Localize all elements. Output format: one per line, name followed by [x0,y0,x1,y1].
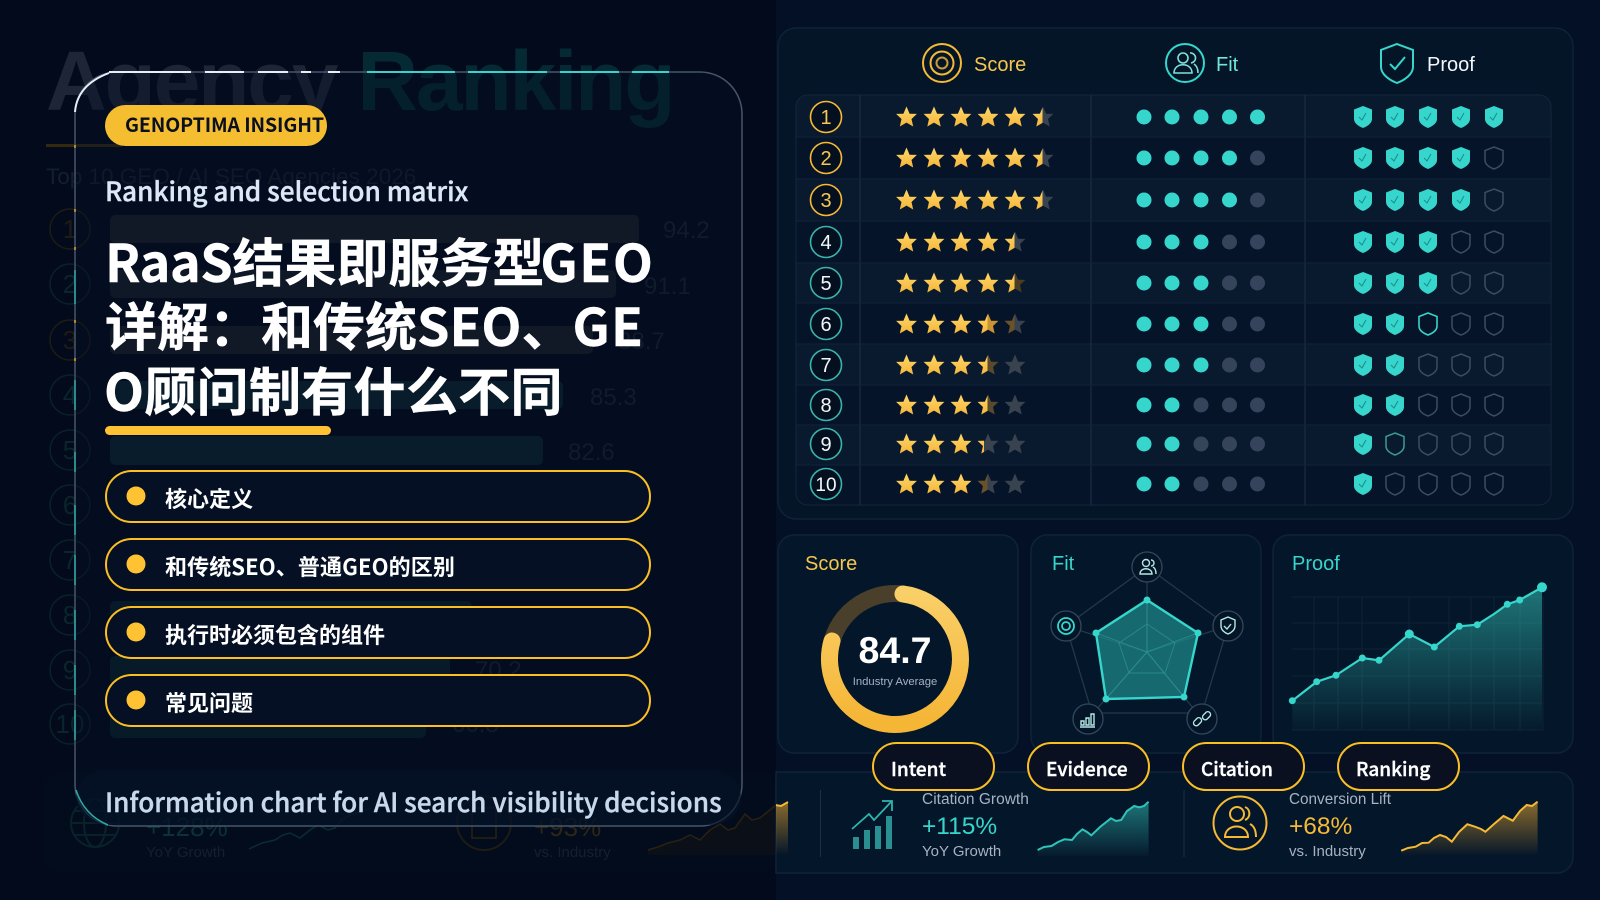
ghost values: 94.2 [663,217,710,244]
ghost values: 82.6 [568,439,615,466]
stat: conversion lift: +68% [1289,813,1352,840]
list item: 常见问题: 常见问题 [165,686,253,718]
rank numbers: 5 [820,273,832,295]
title [104,222,654,426]
stat: conversion lift [1289,791,1392,860]
tag: Citation [1183,743,1304,790]
header: Fit: Fit [1216,54,1239,76]
table [796,95,1551,505]
donut [829,594,960,725]
stat: citation growth [922,791,1029,860]
panel: bottom stats [760,772,1573,873]
grid [1292,597,1543,730]
caption: Industry Average [853,676,937,688]
title: 详解：和传统SEO、GE [105,286,644,361]
rank numbers [810,102,842,500]
rank numbers: 1 [820,107,832,129]
ghost values: 70.2 [475,657,522,684]
footer caption: Information chart for AI search visibility decisions [105,782,722,820]
line [1292,587,1542,701]
fit dots [1136,110,1265,492]
ghost ranks: 10 [56,709,84,739]
icon: growth chart [852,801,892,849]
ghost values: 66.8 [452,711,499,738]
ghost values: 91.1 [644,273,691,300]
tag: Citation: Citation [1201,755,1273,782]
rank numbers: 3 [820,190,832,212]
list item: 常见问题 [106,675,650,726]
ghost values: 88.7 [618,328,665,355]
stat: citation growth: +115% [922,813,997,840]
header: Score [923,44,1026,82]
ghost ranks: 6 [63,490,77,520]
ghost heading: Agency Ranking: Agency Ranking [46,34,673,128]
rank numbers: 9 [820,434,832,456]
ghost bottom stats [44,772,776,873]
list item: 和传统SEO、普通GEO的区别: 和传统SEO、普通GEO的区别 [165,550,455,582]
rank numbers: 8 [820,395,832,417]
panel: intro card [75,72,742,826]
tag: Ranking: Ranking [1356,755,1430,782]
sparkline: amber [1401,802,1538,856]
ghost bottom stats: +128% [146,812,228,842]
ghost ranks: 2 [63,269,77,299]
ghost bottom stats: YoY Growth [146,844,225,861]
ghost ranks: 1 [63,214,77,244]
tag: Ranking [1338,743,1459,790]
stat: conversion lift: vs. Industry [1289,843,1366,860]
ghost subtitle: Top 10 GEO / AI SEO Agencies 2026 [46,164,416,189]
radar icons [1051,552,1243,734]
list item: 核心定义 [106,471,650,522]
header: Proof: Proof [1427,54,1475,76]
ghost ranks: 3 [63,325,77,355]
panel: ranking matrix [778,28,1573,519]
badge: GENOPTIMA INSIGHT: GENOPTIMA INSIGHT [125,109,324,138]
label: Score [805,553,857,575]
header: Score: Score [974,54,1026,76]
ghost values: 85.3 [590,384,637,411]
ghost ranks: 7 [63,545,77,575]
radar polygon [1096,600,1198,699]
title: RaaS结果即服务型GEO [105,222,654,297]
stat: citation growth: Citation Growth [922,791,1029,808]
ghost ranks: 4 [63,380,77,410]
ghost bottom stats: vs. Industry [534,844,611,861]
ghost ranks: 8 [63,600,77,630]
list item: 执行时必须包含的组件 [106,607,650,658]
panel: Fit radar [1031,535,1261,753]
tag: Intent: Intent [891,755,947,782]
proof shields [1354,106,1503,495]
list item: 执行时必须包含的组件: 执行时必须包含的组件 [165,618,385,650]
ghost ranks: 9 [63,655,77,685]
rank numbers: 10 [815,475,837,496]
ghost bottom stats: +93% [534,812,601,842]
tag: Intent [873,743,994,790]
label: Fit [1052,553,1075,575]
radar grid [1066,567,1228,719]
title: O顾问制有什么不同 [104,351,563,426]
rank numbers: 4 [820,232,832,254]
rank numbers: 7 [820,355,832,377]
ghost bars [110,215,639,738]
rank numbers: 6 [820,314,832,336]
header: Proof [1381,44,1475,83]
panel: Proof line chart [1273,535,1573,753]
label: Proof [1292,553,1340,575]
list item: 和传统SEO、普通GEO的区别 [106,539,650,590]
stat: conversion lift: Conversion Lift [1289,791,1392,808]
header: Fit [1166,44,1239,82]
tag: Evidence: Evidence [1046,755,1128,782]
badge: GENOPTIMA INSIGHT [105,105,327,146]
subtitle: Ranking and selection matrix [105,171,469,209]
ghost ranks [50,209,90,744]
rank numbers: 2 [820,148,832,170]
title underline [105,426,331,435]
points [1289,582,1547,704]
value: 84.7 [858,629,932,671]
ghost layer: faded ranking chart behind the card [44,34,776,873]
right background [776,0,1600,900]
tag: Evidence [1028,743,1149,790]
area [1292,587,1542,730]
score stars [896,106,1053,494]
ghost values [452,217,710,738]
stat: citation growth: YoY Growth [922,843,1001,860]
ghost ranks: 5 [63,435,77,465]
sparkline: teal [1038,802,1149,856]
icon: users [1214,796,1266,850]
panel: Score gauge [778,535,1018,753]
amber sparkline end [776,801,788,852]
list item: 核心定义: 核心定义 [165,482,253,514]
